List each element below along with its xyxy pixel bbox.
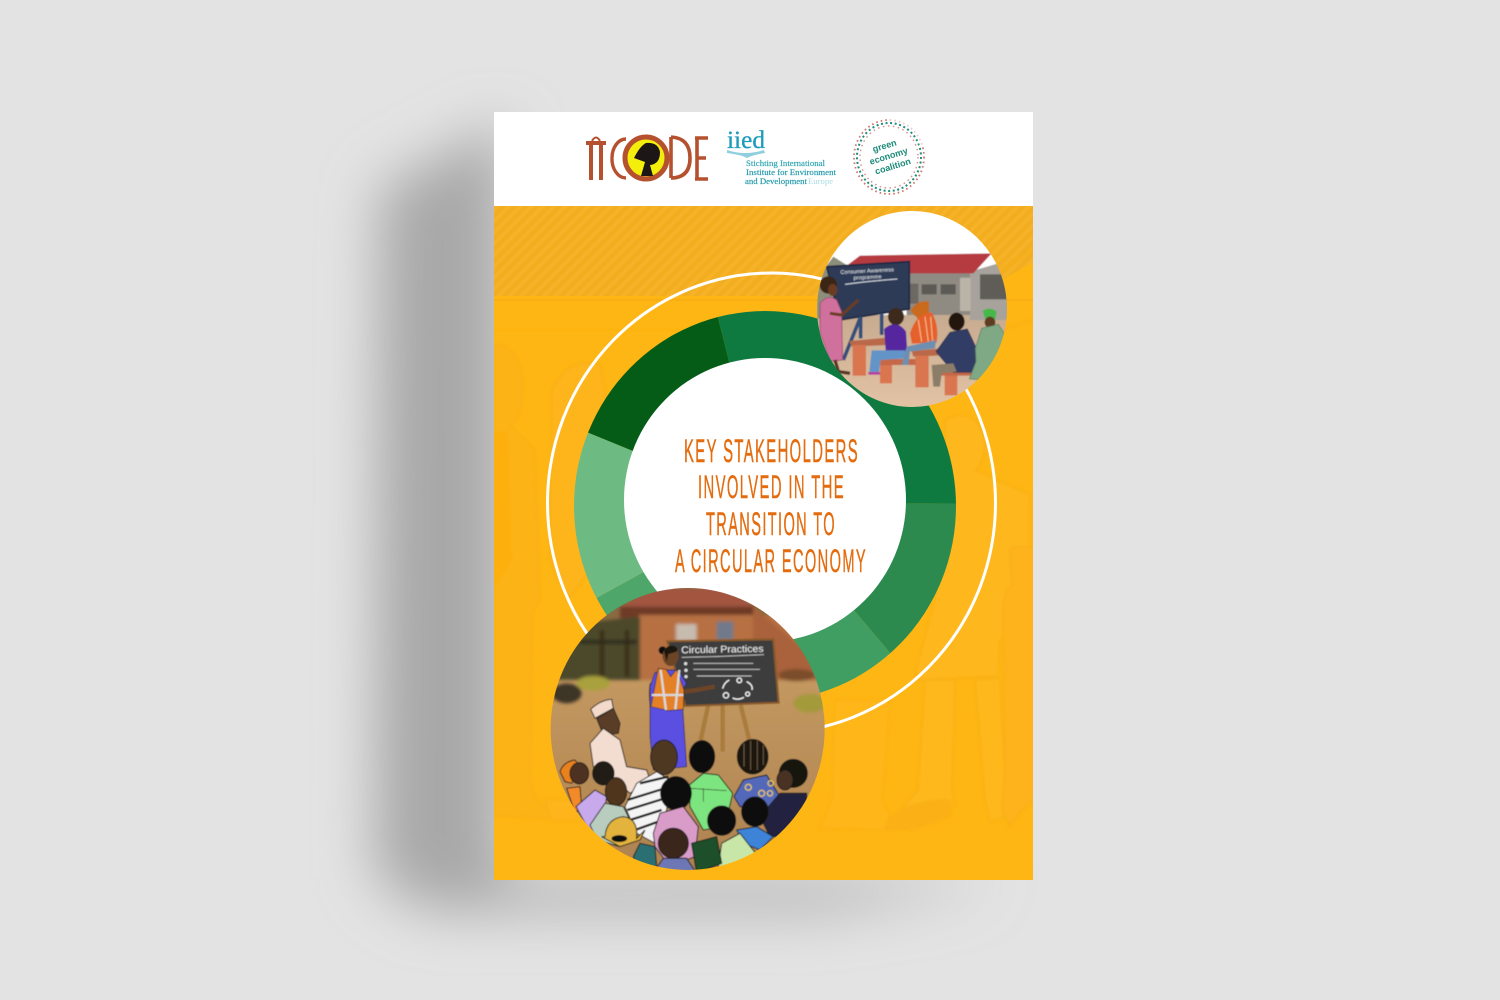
illustration: consumer awareness programme [817, 211, 1007, 407]
faded background figures [554, 250, 1033, 821]
illustration: circular practices [550, 588, 825, 870]
hoodie man [779, 759, 807, 787]
blurred building and trees [550, 588, 827, 713]
lilac shirt [593, 762, 614, 785]
segment: green right [854, 504, 956, 654]
yellow hat child [602, 817, 645, 847]
braided woman [737, 739, 768, 774]
faded centre man [883, 818, 888, 829]
logo: green economy coalition: green [871, 137, 898, 154]
crowd [560, 739, 807, 873]
brochure drop shadow [375, 122, 1000, 910]
logo: iied: Stichting International [746, 158, 826, 168]
brochure cover [494, 112, 1033, 880]
segment: light green left [574, 432, 644, 598]
illustration: consumer awareness programme: Consumer Awareness [840, 267, 894, 276]
segment: green top right [718, 311, 956, 504]
donut hole [624, 358, 906, 642]
easel [701, 705, 749, 752]
brochure cover: A CIRCULAR ECONOMY [675, 543, 867, 579]
small girl [742, 797, 768, 826]
desks [849, 338, 888, 347]
logo: iied [727, 127, 837, 186]
title: INVOLVED IN THE [698, 469, 845, 505]
yellow cover panel [494, 206, 1033, 880]
green shirt [689, 741, 715, 773]
blackboard [667, 639, 779, 706]
segment: green bottom left [596, 572, 658, 616]
man with cap [590, 699, 650, 793]
sage shirt [605, 778, 627, 806]
striped shirt [651, 740, 677, 775]
faded man with apron [916, 416, 1030, 680]
brochure cover: KEY STAKEHOLDERS [684, 433, 859, 469]
white ring [548, 273, 996, 733]
curly child [658, 828, 688, 858]
woman with orange scarf [560, 760, 580, 783]
presenter [650, 645, 715, 770]
logo: green economy coalition: coalition [874, 156, 912, 176]
segment: dark green top left [588, 317, 730, 451]
pink shirt [661, 777, 691, 810]
logo: ACODE [586, 137, 708, 180]
learner: green [983, 309, 997, 323]
logo: iied: Institute for Environment [746, 167, 837, 177]
logo: green economy coalition [854, 118, 924, 194]
logo: iied: iied [727, 127, 765, 154]
dark green shirt [692, 837, 722, 873]
logo: iied: Europe [808, 176, 833, 186]
learner: navy jacket [949, 313, 965, 331]
faded child [1002, 547, 1033, 826]
hatched roof band [494, 206, 1033, 296]
teacher [820, 276, 837, 294]
title [675, 433, 867, 579]
faded man in suit [494, 432, 550, 817]
illustration: consumer awareness programme: programme [853, 274, 882, 282]
header band [494, 112, 1033, 206]
pale green shirt [708, 806, 736, 835]
learner: purple [888, 308, 904, 325]
cycle icon [723, 678, 752, 699]
faded woman [554, 366, 599, 595]
illustration: circular practices: Circular Practices [681, 644, 764, 656]
segment: green bottom [793, 610, 890, 693]
learner: orange stripes [910, 301, 929, 319]
title: TRANSITION TO [706, 506, 836, 542]
logo: green economy coalition: economy [868, 145, 909, 167]
donut chart [574, 311, 956, 693]
logo: iied: and Development [745, 176, 808, 186]
